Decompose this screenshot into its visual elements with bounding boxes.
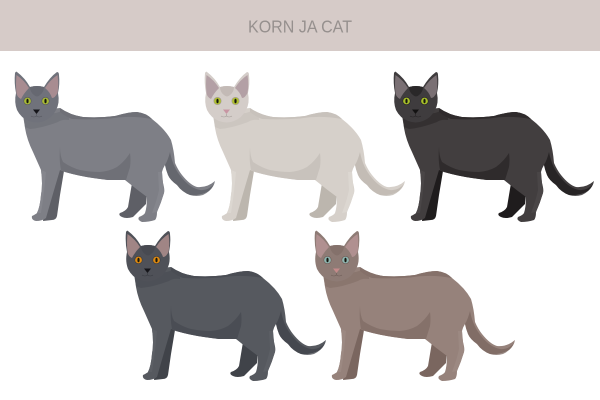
cat: cream with green eyes [205, 72, 405, 222]
cat: blue grey with yellow-green eyes [15, 72, 215, 222]
cat: black with green eyes [394, 72, 594, 222]
cat: dark slate with orange eyes [126, 231, 326, 381]
cat: taupe with grey-green eyes [315, 231, 515, 381]
title: KORN JA CAT [248, 16, 352, 36]
header band [0, 0, 600, 51]
